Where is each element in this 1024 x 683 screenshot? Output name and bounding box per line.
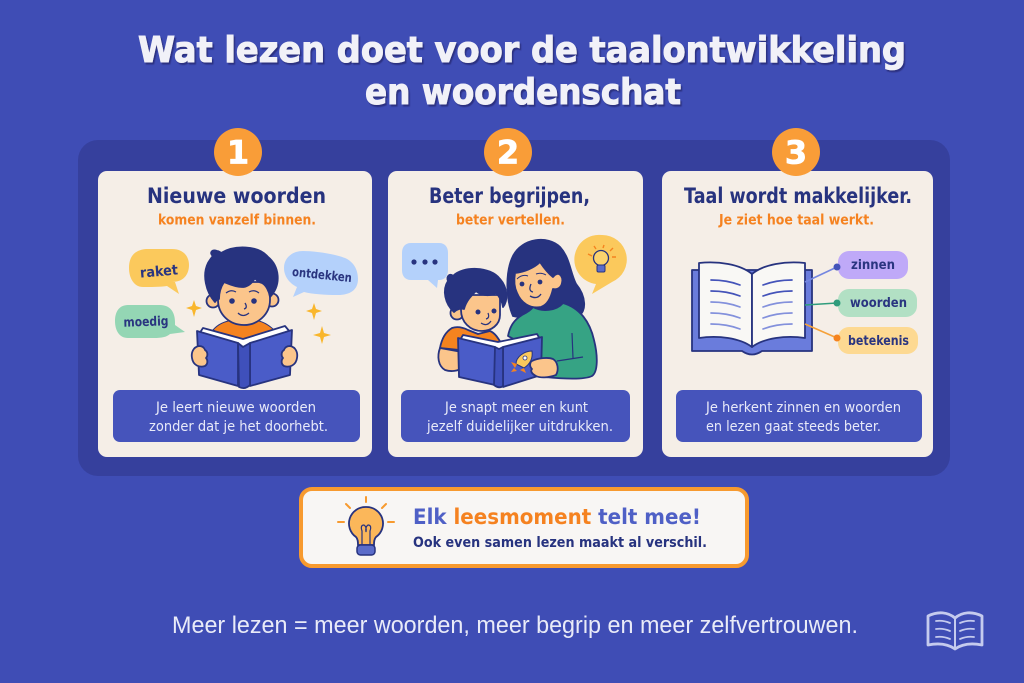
text band: card 3: Je herkent zinnen en woorden bbox=[705, 400, 901, 416]
illustration: open book bbox=[692, 262, 812, 354]
text band: card 3: en lezen gaat steeds beter. bbox=[706, 419, 881, 435]
text band: card 1: zonder dat je het doorhebt. bbox=[149, 419, 328, 435]
speech bubble: moedig bbox=[115, 305, 185, 338]
subheading: card 1: komen vanzelf binnen. bbox=[158, 212, 316, 228]
title: Wat lezen doet voor de taalontwikkeling bbox=[138, 30, 906, 71]
text band: card 2: jezelf duidelijker uitdrukken. bbox=[426, 419, 613, 435]
title bbox=[138, 30, 906, 113]
speech bubble: raket bbox=[129, 249, 189, 294]
subheading: card 3: Je ziet hoe taal werkt. bbox=[718, 212, 874, 228]
speech bubble: raket: raket bbox=[139, 262, 179, 282]
callout heading: Elk leesmoment telt mee! bbox=[413, 505, 701, 529]
text band: card 2: Je snapt meer en kunt bbox=[444, 400, 588, 416]
badge 3: 3 bbox=[785, 134, 807, 172]
text band: card 3 bbox=[676, 390, 922, 442]
label: betekenis: betekenis bbox=[848, 334, 909, 349]
callout subtext: Ook even samen lezen maakt al verschil. bbox=[413, 535, 707, 551]
badge 1 bbox=[214, 128, 262, 176]
text band: card 2 bbox=[401, 390, 630, 442]
label: betekenis bbox=[805, 324, 918, 354]
icon: light bulb bbox=[338, 497, 394, 555]
heading: card 2: Beter begrijpen, bbox=[429, 184, 590, 208]
badge 2 bbox=[484, 128, 532, 176]
callout bbox=[301, 489, 747, 566]
sparkles bbox=[186, 300, 331, 344]
speech bubble: ontdekken bbox=[284, 251, 358, 297]
speech bubble: ontdekken: ontdekken bbox=[291, 264, 353, 285]
label: woorden bbox=[805, 289, 917, 317]
badge 1: 1 bbox=[227, 134, 249, 172]
label: zinnen: zinnen bbox=[851, 258, 895, 273]
panel: card 2 bbox=[388, 128, 643, 457]
label: zinnen bbox=[805, 251, 908, 282]
panel: card 1 bbox=[98, 128, 372, 457]
badge 2: 2 bbox=[497, 134, 519, 172]
icon: footer book bbox=[928, 613, 982, 649]
footer text: Meer lezen = meer woorden, meer begrip en meer zelfvertrouwen. bbox=[172, 612, 858, 639]
subheading: card 2: beter vertellen. bbox=[456, 212, 565, 228]
heading: card 3: Taal wordt makkelijker. bbox=[684, 184, 912, 208]
text band: card 1 bbox=[113, 390, 360, 442]
illustration: mother and child reading bbox=[438, 240, 597, 387]
speech bubble: moedig: moedig bbox=[123, 314, 169, 331]
icon: rocket bbox=[511, 351, 532, 373]
label: woorden: woorden bbox=[850, 296, 907, 311]
panel: card 3 bbox=[662, 128, 933, 457]
title: en woordenschat bbox=[365, 72, 681, 113]
badge 3 bbox=[772, 128, 820, 176]
speech bubble: idea bbox=[574, 235, 627, 294]
illustration: boy reading bbox=[192, 247, 297, 388]
panel: three steps background bbox=[78, 140, 950, 476]
text band: card 1: Je leert nieuwe woorden bbox=[155, 400, 316, 416]
heading: card 1: Nieuwe woorden bbox=[147, 184, 326, 208]
speech bubble: dots bbox=[402, 243, 448, 288]
